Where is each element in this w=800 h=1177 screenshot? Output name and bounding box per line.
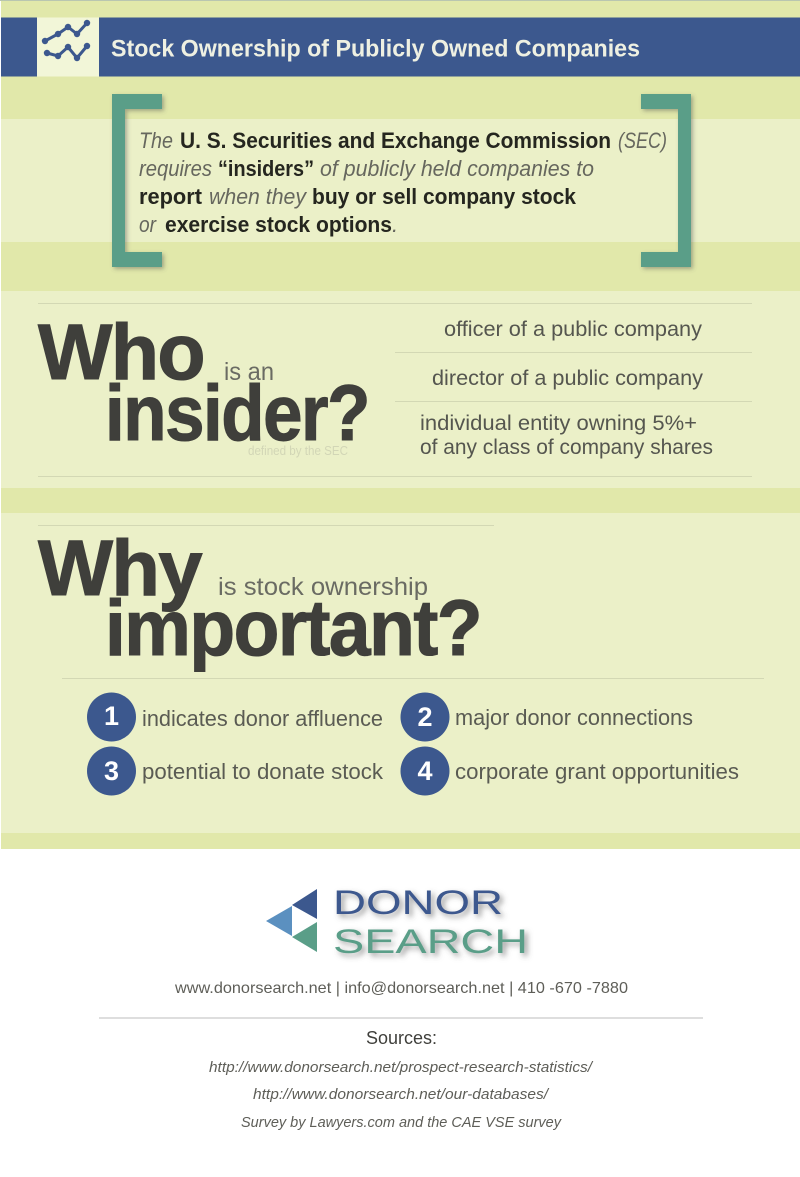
reason 3: 3 — [104, 756, 119, 786]
reason 4: 4 — [417, 756, 433, 786]
logo: Donor Search — [266, 884, 528, 961]
reason 4: corporate grant opportunities — [455, 759, 739, 784]
SEC statement text: of publicly held companies to — [320, 156, 594, 181]
title: Stock Ownership of Publicly Owned Companies — [111, 36, 640, 62]
sources: http://www.donorsearch.net/our-databases/ — [253, 1086, 550, 1103]
sources: Sources: — [366, 1028, 437, 1048]
background panel — [0, 0, 800, 849]
insider definitions list — [420, 317, 713, 459]
sources: http://www.donorsearch.net/prospect-research-statistics/ — [209, 1059, 594, 1076]
logo: Donor Search: DONOR — [333, 884, 503, 922]
heading: who is an insider: Who — [38, 309, 204, 396]
heading: why is stock ownership important: important? — [105, 585, 481, 672]
SEC statement text: report — [139, 184, 203, 209]
reason 2: major donor connections — [455, 705, 693, 730]
SEC statement text: The — [139, 128, 173, 153]
SEC statement text: when they — [209, 184, 308, 209]
header banner — [1, 18, 800, 76]
heading: who is an insider: is an — [224, 358, 274, 386]
heading: who is an insider: insider? — [105, 370, 369, 457]
contact line: www.donorsearch.net | info@donorsearch.net | 410 -670 -7880 — [174, 980, 628, 997]
insider definitions list: officer of a public company — [444, 317, 702, 341]
heading: why is stock ownership important — [38, 525, 481, 672]
SEC statement text: “insiders” — [218, 156, 314, 181]
SEC statement text: exercise stock options — [165, 212, 392, 237]
reason 3: potential to donate stock — [142, 759, 384, 784]
insider definitions list: director of a public company — [432, 366, 703, 390]
reason 2: 2 — [417, 702, 433, 732]
reason 4 — [400, 746, 739, 796]
right bracket — [641, 94, 691, 267]
SEC statement text: or — [139, 212, 157, 237]
panel: who is an insider — [38, 304, 752, 476]
reason 1 — [87, 692, 383, 742]
reason 1: indicates donor affluence — [142, 706, 383, 731]
SEC statement text: . — [392, 212, 398, 237]
SEC statement text: U. S. Securities and Exchange Commission — [180, 128, 611, 153]
reason 2 — [400, 692, 693, 742]
heading: why is stock ownership important: Why — [38, 525, 202, 612]
sources — [209, 1028, 594, 1131]
SEC statement text: (SEC) — [618, 128, 667, 153]
heading: why is stock ownership important: is stock ownership — [218, 573, 428, 601]
SEC statement text: buy or sell company stock — [312, 184, 577, 209]
reason 3 — [87, 746, 384, 796]
left bracket — [112, 94, 162, 267]
heading: who is an insider — [38, 309, 369, 458]
insider definitions list: individual entity owning 5%+ — [420, 411, 697, 435]
SEC statement text: requires — [139, 156, 212, 181]
reason 1: 1 — [104, 701, 119, 731]
insider definitions list: of any class of company shares — [420, 435, 713, 459]
icon: stock chart lines — [37, 18, 99, 76]
panel: why is stock ownership important — [38, 525, 764, 796]
heading: who is an insider: defined by the SEC — [248, 443, 348, 458]
sources: Survey by Lawyers.com and the CAE VSE survey — [241, 1114, 562, 1131]
SEC statement text — [139, 128, 667, 237]
logo: Donor Search: SEARCH — [333, 923, 528, 961]
